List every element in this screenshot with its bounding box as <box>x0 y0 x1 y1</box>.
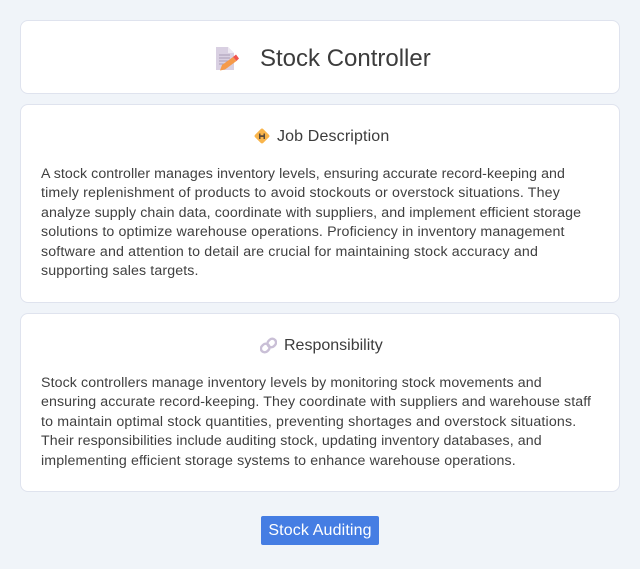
text block: job description <box>41 166 581 279</box>
button: stock auditing: Stock Auditing <box>268 522 372 539</box>
text: to maintain optimal stock quantities, preventing shortages and overstock situations. <box>41 414 576 430</box>
text: timely replenishment of products to avoid stockouts or overstock situations. They <box>41 185 560 201</box>
text: A stock controller manages inventory levels, ensuring accurate record-keeping and <box>41 166 565 182</box>
text: ensuring accurate record-keeping. They coordinate with suppliers and warehouse staff <box>41 394 591 410</box>
heading: responsibility: Responsibility <box>284 337 383 354</box>
panel: job description <box>20 104 620 303</box>
text: supporting sales targets. <box>41 263 199 279</box>
title: Stock Controller <box>260 45 431 72</box>
text: Stock controllers manage inventory levels by monitoring stock movements and <box>41 375 542 391</box>
text: software and attention to detail are crucial for maintaining stock accuracy and <box>41 244 538 260</box>
icon: diamond sign <box>254 128 270 144</box>
panel: responsibility <box>20 313 620 492</box>
heading: job description: Job Description <box>277 128 389 145</box>
icon: document with pencil <box>216 47 239 70</box>
text: analyze supply chain data, coordinate with suppliers, and implement efficient storage <box>41 205 581 221</box>
text block: responsibility <box>41 375 591 469</box>
text: implementing efficient storage systems to enhance warehouse operations. <box>41 453 516 469</box>
button: stock auditing <box>261 516 379 545</box>
text: solutions to optimize warehouse operations. Proficiency in inventory management <box>41 224 565 240</box>
icon: chain link <box>260 338 277 354</box>
text: Their responsibilities include auditing stock, updating inventory databases, and <box>41 433 542 449</box>
panel: title card <box>20 20 620 94</box>
